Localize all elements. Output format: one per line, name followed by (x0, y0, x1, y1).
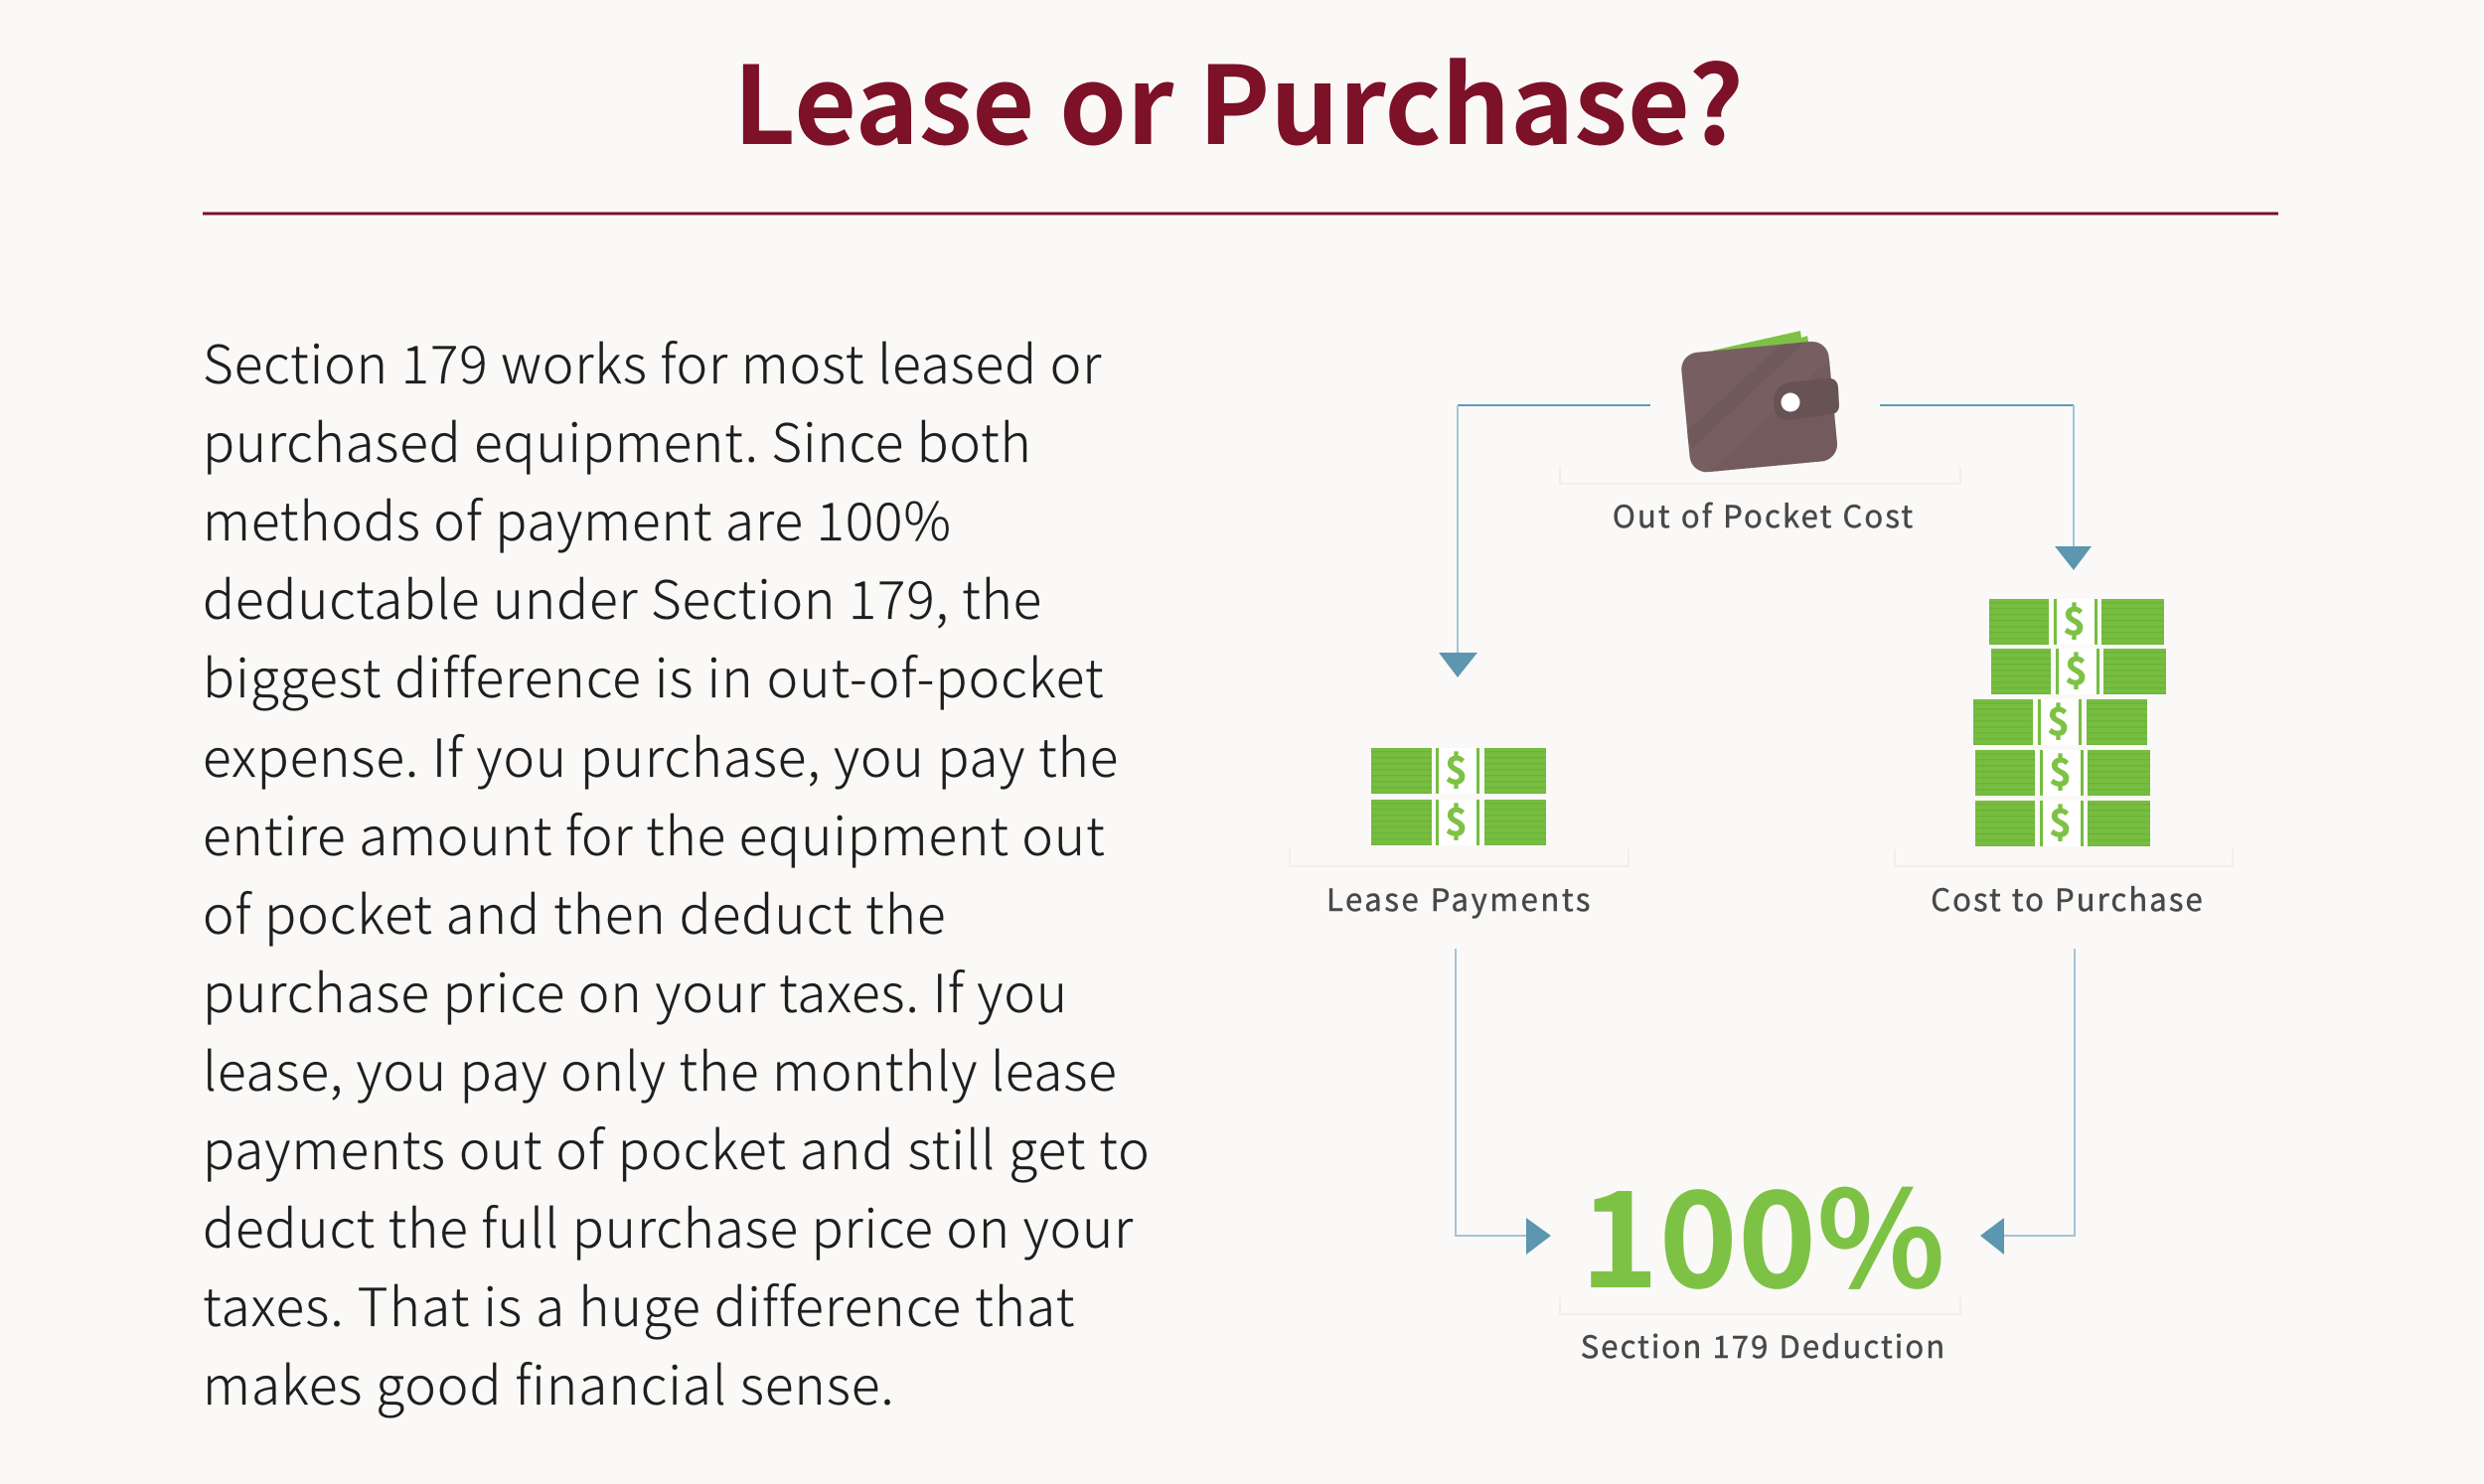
body paragraph: makes good financial sense. (203, 1345, 895, 1420)
arrow: wallet to lease payments (1439, 405, 1650, 677)
money bundle (1371, 792, 1546, 846)
money bundle: $ (2049, 742, 2072, 797)
title rule (203, 213, 2278, 215)
icon: wallet (1680, 331, 1843, 475)
label: cost to purchase: Cost to Purchase (1931, 875, 2205, 920)
money bundle: $ (1445, 792, 1468, 846)
body paragraph: Section 179 works for most leased or (203, 324, 1102, 399)
body paragraph: of pocket and then deduct the (203, 874, 947, 950)
money bundle: $ (2047, 691, 2070, 746)
icon: purchase money stack (1973, 591, 2166, 847)
label: section 179 deduction: Section 179 Deduction (1581, 1322, 1946, 1367)
body paragraph: expense. If you purchase, you pay the (203, 717, 1119, 793)
bracket: deduction (1560, 1297, 1960, 1314)
body paragraph: biggest difference is in out-of-pocket (203, 638, 1105, 713)
label: out of pocket cost: Out of Pocket Cost (1613, 492, 1915, 536)
body paragraph: methods of payment are 100% (203, 481, 952, 556)
body paragraph: taxes. That is a huge difference that (203, 1266, 1075, 1342)
money bundle: $ (2049, 793, 2072, 847)
body paragraph: deductable under Section 179, the (203, 559, 1042, 635)
money bundle (1973, 691, 2147, 746)
arrow: wallet to cost to purchase (1880, 405, 2092, 570)
money bundle (1975, 742, 2150, 797)
body paragraph: entire amount for the equipment out (203, 796, 1106, 871)
body paragraph: purchased equipment. Since both (203, 402, 1031, 478)
title: Lease or Purchase? (733, 20, 1744, 176)
money bundle: $ (2063, 591, 2086, 646)
money bundle (1371, 740, 1546, 795)
bracket: cost to purchase (1895, 849, 2233, 866)
money bundle: $ (1445, 740, 1468, 795)
money bundle: $ (2065, 641, 2088, 695)
body paragraph: lease, you pay only the monthly lease (203, 1031, 1118, 1107)
icon: lease payment money stack (1371, 740, 1546, 846)
arrow: cost to purchase to deduction (1980, 949, 2075, 1255)
body paragraph (203, 324, 1151, 1420)
arrow: lease payments to deduction (1456, 949, 1551, 1255)
big number: 100%: 100% (1580, 1132, 1945, 1326)
body paragraph: deduct the full purchase price on your (203, 1188, 1134, 1263)
body paragraph: payments out of pocket and still get to (203, 1110, 1151, 1185)
body paragraph: purchase price on your taxes. If you (203, 953, 1068, 1028)
money bundle (1989, 591, 2164, 646)
bracket: lease payments (1290, 849, 1629, 866)
bracket: out of pocket (1560, 467, 1960, 484)
money bundle (1991, 641, 2166, 695)
money bundle (1975, 793, 2150, 847)
label: lease payments: Lease Payments (1326, 875, 1593, 920)
